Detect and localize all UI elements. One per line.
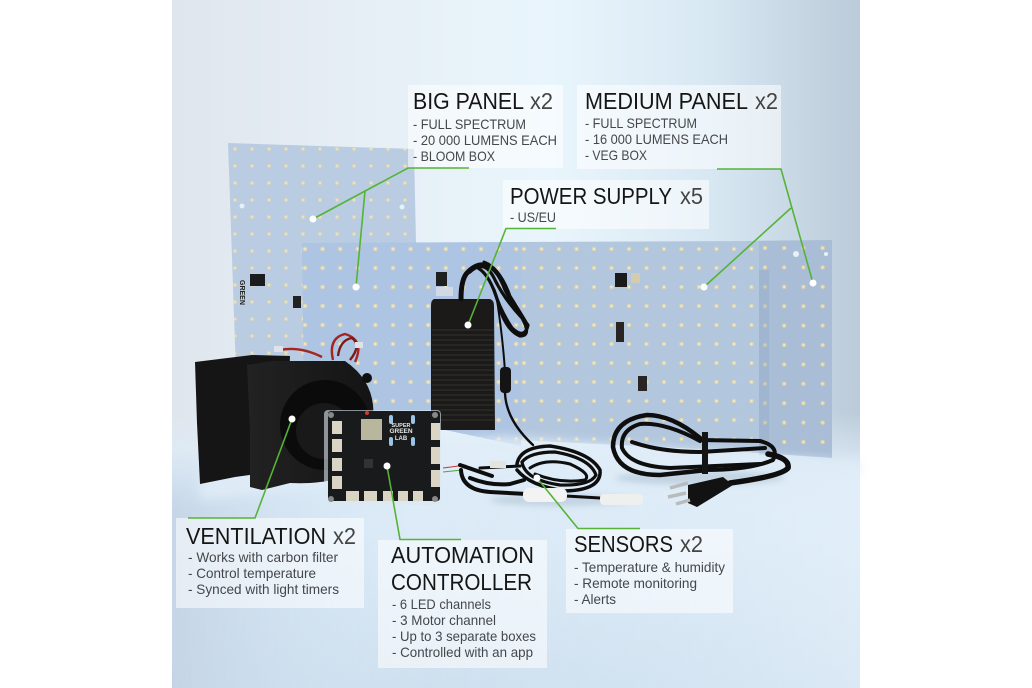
callout: ventilation: - Synced with light timers (188, 581, 339, 597)
big panel back: GREEN (238, 280, 245, 305)
callout: ventilation: x2 (333, 523, 356, 549)
callout: sensors (566, 529, 733, 613)
controller board: SUPER (392, 423, 411, 429)
callout: sensors: - Alerts (574, 591, 616, 607)
medium panel front (516, 241, 759, 452)
leader: medium panel (700, 169, 816, 290)
sensor cables (443, 446, 643, 506)
callout: medium panel: - VEG BOX (585, 147, 648, 163)
leader: big panel (310, 168, 469, 290)
callout: medium panel: x2 (755, 88, 778, 114)
callout: automation controller: CONTROLLER (391, 569, 532, 595)
callout: sensors: SENSORS (574, 531, 673, 557)
callout: sensors: - Temperature & humidity (574, 559, 725, 575)
big panel back (228, 143, 416, 380)
callout: automation controller: - Up to 3 separate boxes (392, 628, 536, 644)
leader: power supply (464, 228, 556, 328)
callout: medium panel (577, 85, 781, 169)
right fan (247, 361, 373, 490)
callout: automation controller: - 3 Motor channel (392, 612, 496, 628)
controller board: GREEN (389, 428, 413, 435)
leader: ventilation (188, 416, 296, 518)
sensors (523, 488, 567, 502)
leader: automation controller (384, 462, 461, 540)
callout: medium panel: - FULL SPECTRUM (585, 115, 697, 131)
plug (688, 477, 733, 507)
callout: automation controller (378, 540, 547, 668)
leader: sensors (534, 474, 640, 528)
callout: ventilation (176, 518, 364, 608)
background photo backdrop (172, 0, 860, 688)
medium panel right (745, 240, 832, 458)
callout: automation controller: - 6 LED channels (392, 596, 491, 612)
callout: power supply (503, 180, 709, 229)
callout: ventilation: VENTILATION (186, 523, 326, 549)
callout: sensors: - Remote monitoring (574, 575, 697, 591)
callout: big panel: - BLOOM BOX (413, 148, 496, 164)
callout: power supply: - US/EU (510, 209, 556, 225)
callout: ventilation: - Control temperature (188, 565, 316, 581)
callout: power supply: POWER SUPPLY (510, 183, 672, 209)
callout: automation controller: - Controlled with an app (392, 644, 533, 660)
infographic (172, 0, 862, 688)
callout: power supply: x5 (680, 183, 703, 209)
controller board: LAB (395, 436, 408, 442)
left fan (195, 355, 290, 484)
floor edge highlight (200, 436, 860, 500)
fans (195, 334, 373, 490)
controller board (324, 410, 441, 505)
power supply (431, 262, 533, 445)
callout: big panel: BIG PANEL (413, 88, 524, 114)
red wires (280, 334, 358, 362)
callout: medium panel: - 16 000 LUMENS EACH (585, 131, 728, 147)
callout: big panel (408, 85, 563, 168)
callout: automation controller: AUTOMATION (391, 542, 534, 568)
callout: ventilation: - Works with carbon filter (188, 549, 338, 565)
big panel front (302, 242, 521, 446)
callout: sensors: x2 (680, 531, 703, 557)
callout: big panel: - 20 000 LUMENS EACH (413, 132, 557, 148)
power supply cables (461, 262, 533, 445)
callout: big panel: x2 (530, 88, 553, 114)
power cord (613, 415, 788, 507)
callout: medium panel: MEDIUM PANEL (585, 88, 748, 114)
callout: big panel: - FULL SPECTRUM (413, 116, 526, 132)
